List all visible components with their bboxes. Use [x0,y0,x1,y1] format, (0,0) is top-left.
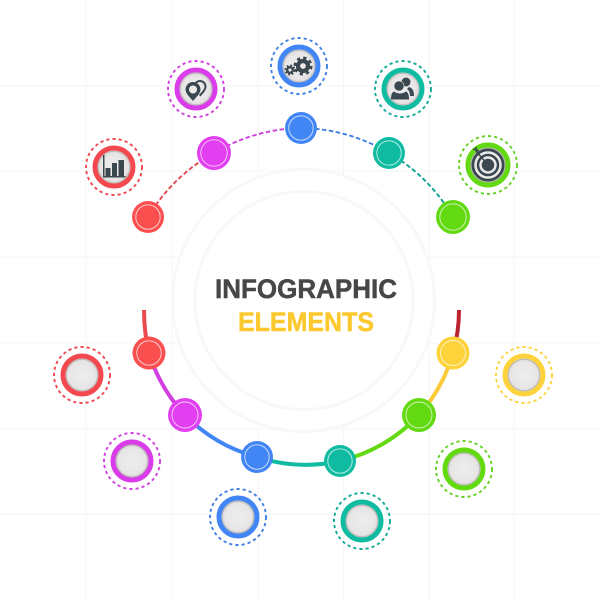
icon: gears badge [271,38,327,94]
empty badge: yellow [496,347,552,403]
empty badge: purple [104,433,160,489]
icon: target badge [459,136,517,194]
top timeline nodes [132,112,470,234]
bottom timeline nodes [132,336,470,477]
bottom timeline arc [144,310,459,465]
empty badge: blue [210,489,266,545]
icon: people badge [375,61,431,117]
empty badge: teal [334,493,390,549]
icon: bar chart badge [86,139,142,195]
title: ELEMENTS [238,307,374,337]
empty badge: red [54,347,110,403]
top dashed arc connectors [148,128,453,217]
title: INFOGRAPHIC [215,274,397,304]
central white disc with rings [172,170,434,432]
icon: map pins badge [168,61,224,117]
empty badge: green [436,441,492,497]
title [215,274,397,337]
